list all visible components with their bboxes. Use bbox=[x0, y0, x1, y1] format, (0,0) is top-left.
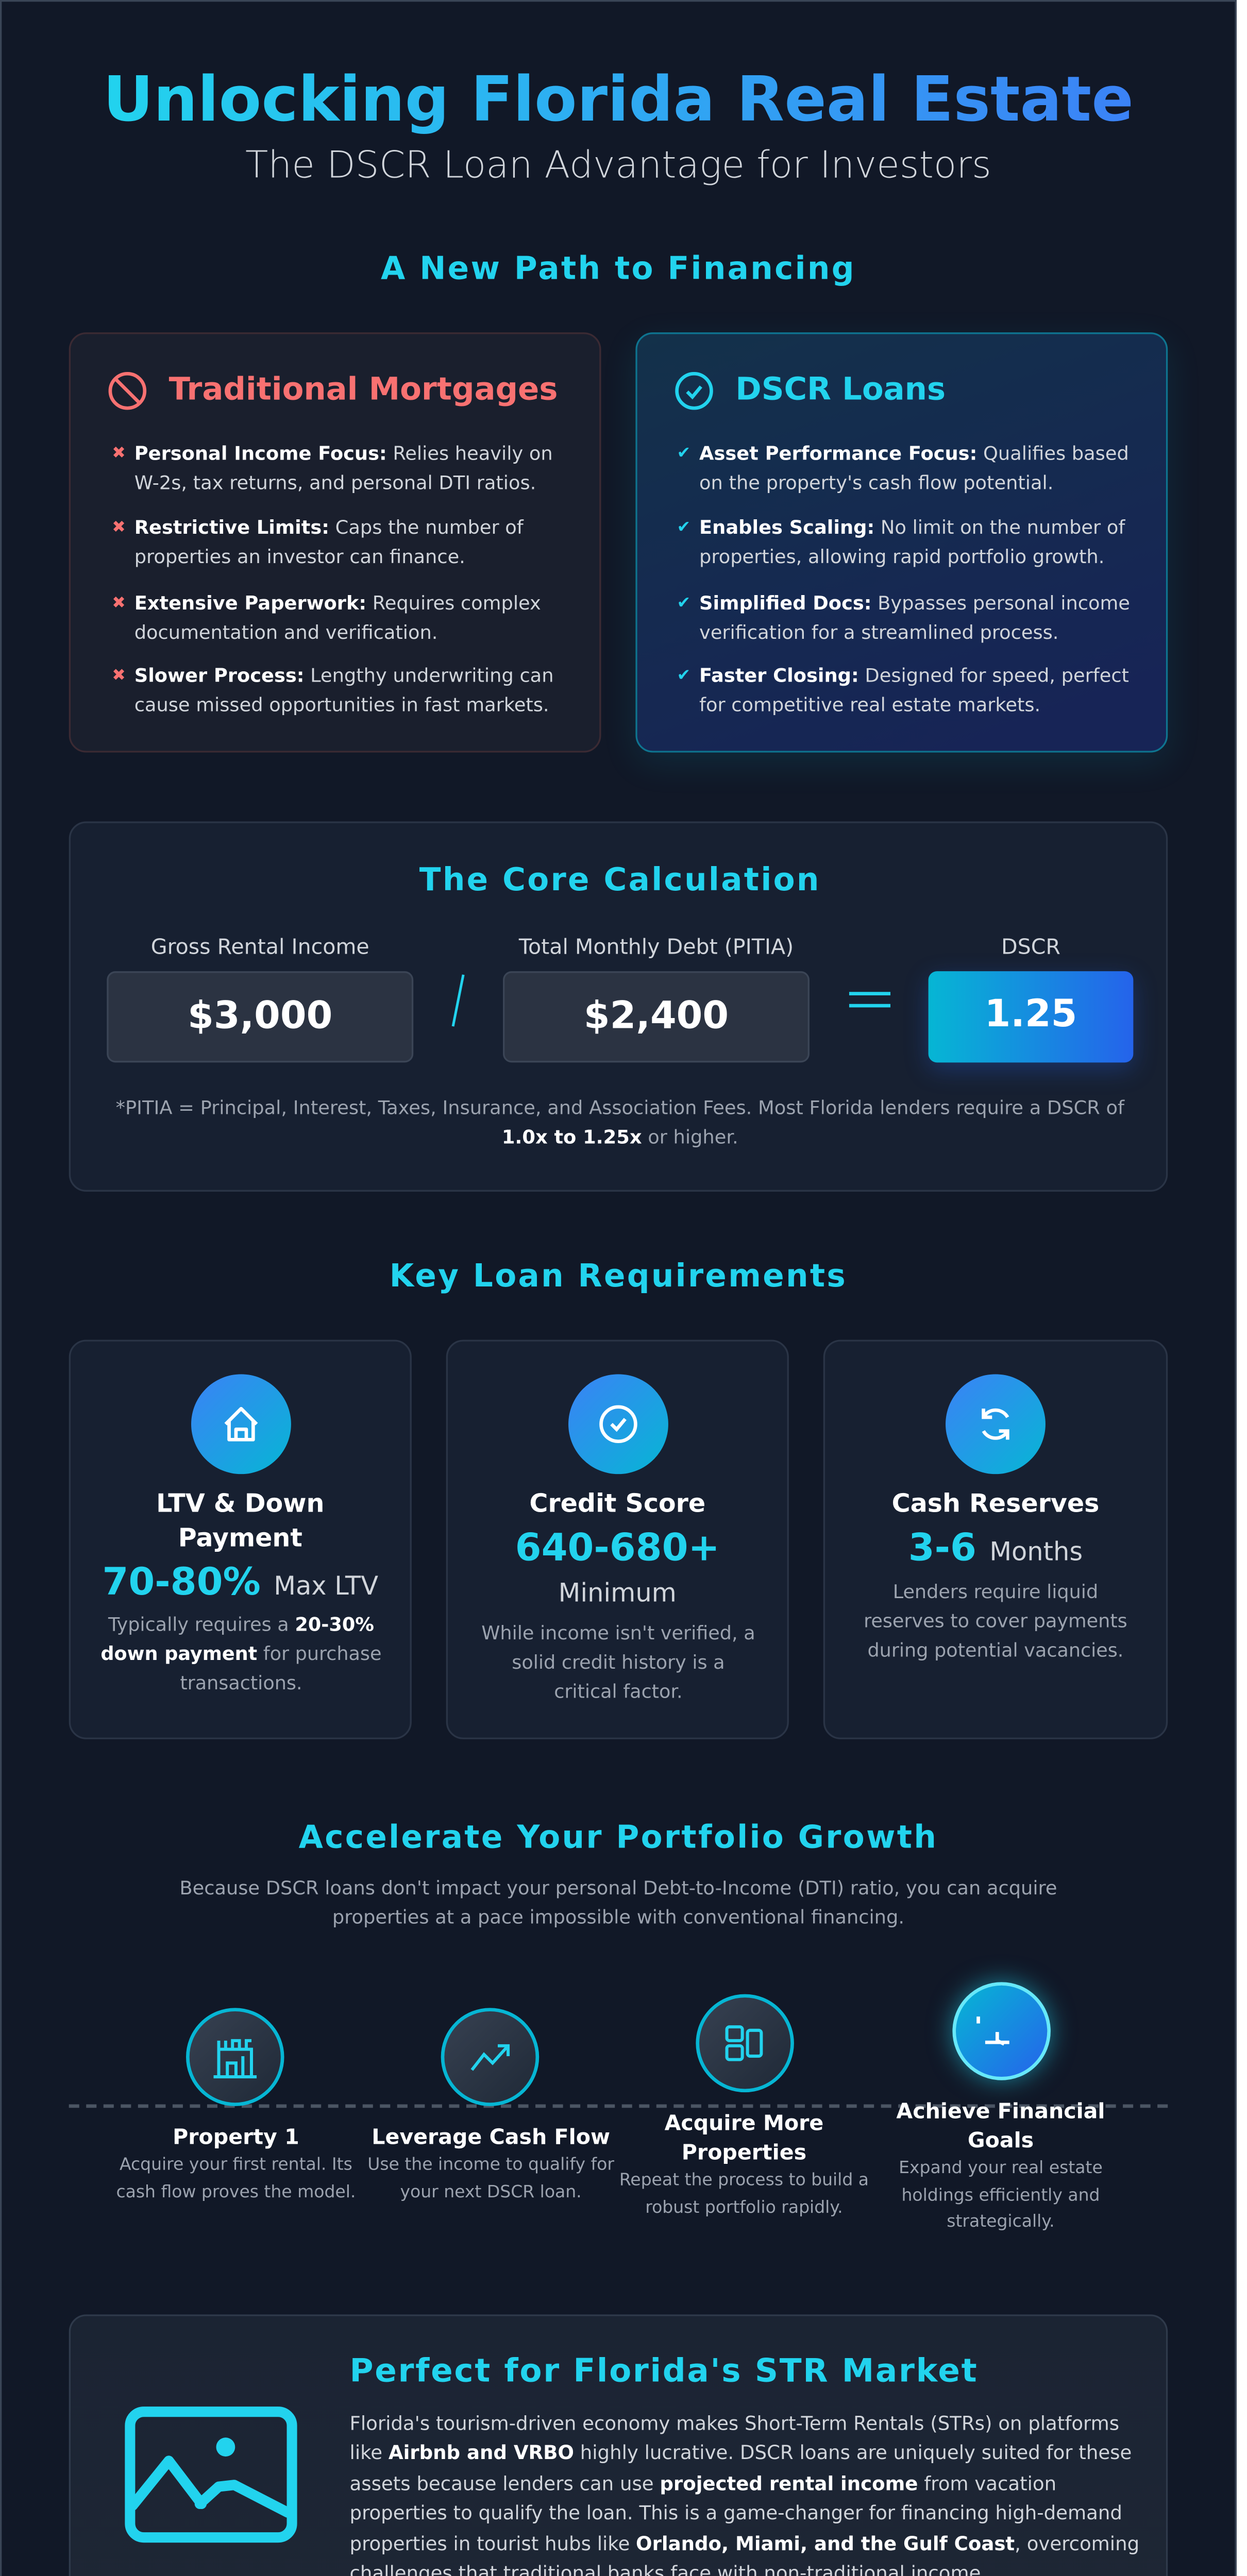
list: dscr items: Faster Closing: Designed for speed, perfect for competitive real estate markets. bbox=[699, 665, 1129, 716]
value box: dscr result: 1.25 bbox=[985, 994, 1077, 1037]
list: traditional items: Extensive Paperwork: Requires complex documentation and verification. bbox=[134, 592, 541, 644]
timeline bbox=[69, 1967, 1168, 2232]
timeline: Repeat the process to build a robust portfolio rapidly. bbox=[619, 2172, 869, 2217]
heading: dscr: DSCR Loans bbox=[735, 372, 946, 408]
icon: check circle bbox=[675, 372, 713, 410]
card: credit score: 640-680+ bbox=[515, 1528, 720, 1570]
heading: core calculation: The Core Calculation bbox=[419, 863, 821, 899]
panel: dscr loans: ✔ bbox=[677, 594, 690, 613]
operator: equals bbox=[849, 992, 890, 1008]
list: dscr items: Asset Performance Focus: Qualifies based on the property's cash flow potential. bbox=[699, 443, 1129, 494]
card: cash reserves: Lenders require liquid reserves to cover payments during potential vacancies. bbox=[864, 1581, 1127, 1662]
panel: dscr loans: ✔ bbox=[677, 518, 690, 537]
icon: prohibited bbox=[108, 372, 146, 410]
list: traditional items: Slower Process: Lengthy underwriting can cause missed opportunities in fast markets. bbox=[134, 665, 554, 716]
label: dscr: DSCR bbox=[1001, 935, 1060, 959]
card: cash reserves bbox=[823, 1340, 1168, 1739]
list: traditional items: Personal Income Focus: Relies heavily on W-2s, tax returns, and personal DTI ratios. bbox=[134, 443, 553, 494]
timeline: Acquire More Properties bbox=[665, 2111, 823, 2165]
list: traditional items: Restrictive Limits: Caps the number of properties an investor can finance. bbox=[134, 517, 524, 568]
card: ltv bbox=[69, 1340, 412, 1739]
panel: traditional mortgages bbox=[69, 332, 601, 753]
card: ltv: Typically requires a 20-30% down payment for purchase transactions. bbox=[100, 1614, 381, 1694]
step: leverage cash flow bbox=[441, 2008, 539, 2106]
value box: 3000: $3,000 bbox=[188, 995, 332, 1039]
icon: image bbox=[125, 2406, 297, 2543]
timeline: Leverage Cash Flow bbox=[372, 2125, 610, 2149]
card: ltv: LTV & Down bbox=[156, 1489, 324, 1519]
label: total monthly debt: Total Monthly Debt (PITIA) bbox=[519, 935, 794, 959]
card: ltv: 70-80% Max LTV bbox=[102, 1562, 378, 1605]
list: dscr items: Enables Scaling: No limit on the number of properties, allowing rapid portfolio growth. bbox=[699, 517, 1125, 568]
step: achieve financial goals bbox=[952, 1982, 1051, 2080]
footnote: *PITIA = Principal, Interest, Taxes, Insurance, and Association Fees. Most Florida lenders require a DSCR of 1.0x to 1.25x or higher. bbox=[116, 1097, 1124, 1148]
list: dscr items bbox=[677, 443, 1130, 716]
panel: traditional mortgages: ✖ bbox=[112, 518, 126, 537]
timeline: Acquire your first rental. Its cash flow proves the model. bbox=[116, 2156, 356, 2201]
timeline: Use the income to qualify for your next DSCR loan. bbox=[367, 2156, 614, 2201]
panel: dscr loans: ✔ bbox=[677, 444, 690, 463]
timeline: Property 1 bbox=[173, 2125, 299, 2149]
list: dscr items: Simplified Docs: Bypasses personal income verification for a streamlined process. bbox=[699, 592, 1130, 644]
heading: str market: Perfect for Florida's STR Market bbox=[350, 2354, 978, 2390]
panel: florida str market bbox=[69, 2314, 1168, 2576]
step: acquire more properties bbox=[696, 1994, 794, 2092]
value box: 2400: $2,400 bbox=[584, 995, 729, 1039]
heading: key loan requirements: Key Loan Requirements bbox=[390, 1259, 847, 1295]
panel: traditional mortgages: ✖ bbox=[112, 444, 126, 463]
card: ltv: Payment bbox=[178, 1524, 302, 1553]
card: credit score bbox=[446, 1340, 789, 1739]
value box: dscr result bbox=[929, 971, 1133, 1062]
card: credit score: While income isn't verified, a solid credit history is a critical factor. bbox=[481, 1622, 755, 1703]
card: cash reserves: 3-6 Months bbox=[908, 1528, 1083, 1570]
icon: refresh bbox=[946, 1374, 1046, 1474]
step: property 1 bbox=[186, 2008, 284, 2106]
operator: divide bbox=[451, 974, 465, 1027]
subtitle: The DSCR Loan Advantage for Investors bbox=[245, 145, 991, 188]
value box: 2400 bbox=[503, 971, 810, 1062]
text: accelerate intro: Because DSCR loans don't impact your personal Debt-to-Income (DTI) ratio, you can acquire properties at a pace impossible with conventional financing. bbox=[179, 1877, 1057, 1929]
heading: new path: A New Path to Financing bbox=[381, 251, 856, 287]
heading: traditional: Traditional Mortgages bbox=[169, 372, 558, 408]
panel: dscr loans bbox=[635, 332, 1168, 753]
title: Unlocking Florida Real Estate bbox=[103, 65, 1134, 136]
timeline: Expand your real estate holdings efficiently and strategically. bbox=[899, 2159, 1103, 2232]
label: gross rental income: Gross Rental Income bbox=[151, 935, 369, 959]
card: cash reserves: Cash Reserves bbox=[892, 1489, 1099, 1519]
value box: 3000 bbox=[107, 971, 413, 1062]
panel: core calculation bbox=[69, 821, 1168, 1192]
heading: accelerate: Accelerate Your Portfolio Growth bbox=[299, 1820, 938, 1856]
list: traditional items bbox=[112, 443, 554, 716]
timeline: Achieve Financial Goals bbox=[896, 2099, 1105, 2153]
panel: traditional mortgages: ✖ bbox=[112, 594, 126, 613]
icon: house bbox=[191, 1374, 291, 1474]
card: credit score: Minimum bbox=[559, 1579, 677, 1608]
panel: traditional mortgages: ✖ bbox=[112, 667, 126, 685]
panel: dscr loans: ✔ bbox=[677, 667, 690, 685]
icon: badge check bbox=[568, 1374, 668, 1474]
card: credit score: Credit Score bbox=[529, 1489, 705, 1519]
